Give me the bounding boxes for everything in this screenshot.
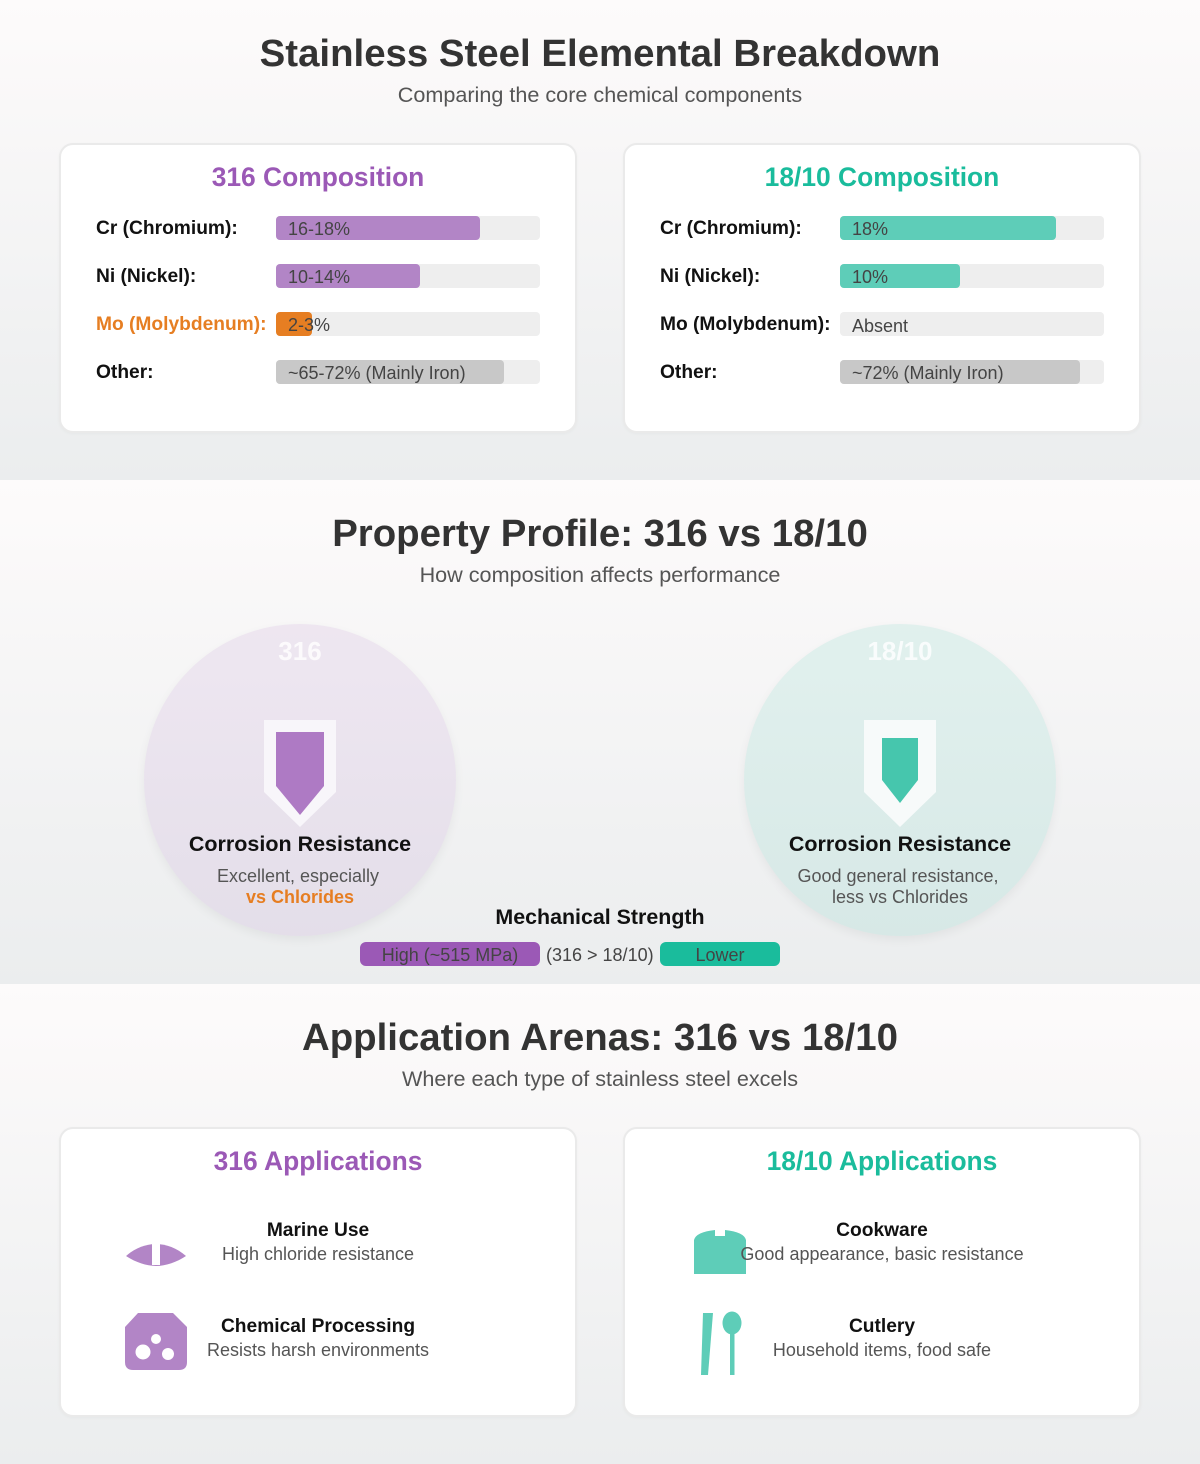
bar: nickel 10% <box>840 264 1104 288</box>
bar: nickel 10-14%: 10-14% <box>288 267 350 287</box>
bar: molybdenum 2-3%: 2-3% <box>288 315 330 335</box>
bar: molybdenum absent: Absent <box>852 316 908 336</box>
heading: 18/10 applications: 18/10 Applications <box>767 1146 997 1176</box>
heading: 316 composition: 316 Composition <box>212 162 424 192</box>
bar: chromium 18%: 18% <box>852 219 888 239</box>
heading: mechanical strength: Mechanical Strength <box>495 905 705 929</box>
row label: nickel: Ni (Nickel): <box>96 266 196 287</box>
heading: corrosion resistance: Corrosion Resistance <box>789 832 1011 856</box>
heading: property profile: Property Profile: 316 vs 18/10 <box>332 512 868 555</box>
subtitle: application arenas: Where each type of stainless steel excels <box>402 1066 798 1091</box>
bar: chromium 18% <box>840 216 1104 240</box>
label: 18/10: 18/10 <box>867 636 933 666</box>
bar: other 65-72% <box>276 360 540 384</box>
icon: marine <box>126 1244 186 1266</box>
row label: chromium: Cr (Chromium): <box>660 218 802 239</box>
text: 316 corrosion description: vs Chlorides <box>246 887 354 907</box>
subtitle: property profile: How composition affects performance <box>420 562 780 587</box>
bar: nickel 10%: 10% <box>852 267 888 287</box>
text: 18/10 corrosion description: Good general resistance, <box>797 866 999 886</box>
heading: corrosion resistance: Corrosion Resistance <box>189 832 411 856</box>
bar: 316 high strength <box>360 942 540 966</box>
bar: chromium 16-18%: 16-18% <box>288 219 350 239</box>
text: 316 corrosion description: Excellent, especially <box>217 866 379 886</box>
bar: other 72%: ~72% (Mainly Iron) <box>852 363 1004 383</box>
circle: 316 corrosion resistance <box>144 624 456 936</box>
label: 316: 316 <box>278 636 322 666</box>
bar: other 65-72%: ~65-72% (Mainly Iron) <box>288 363 466 383</box>
panel: elemental breakdown section <box>0 0 1200 480</box>
bar: 18/10 lower strength: Lower <box>695 945 745 965</box>
text: chemical processing description: Resists harsh environments <box>207 1340 429 1360</box>
heading: 18/10 composition: 18/10 Composition <box>765 162 999 192</box>
row label: molybdenum: Mo (Molybdenum): <box>660 314 831 335</box>
row label: molybdenum: Mo (Molybdenum): <box>96 314 267 335</box>
icon: cookware <box>694 1230 746 1274</box>
icon: 316 shield <box>264 720 336 827</box>
bar: nickel 10-14% <box>276 264 540 288</box>
text: 18/10 corrosion description <box>797 866 999 907</box>
row label: other: Other: <box>660 362 718 383</box>
title: Stainless Steel Elemental Breakdown <box>260 32 940 75</box>
bar: molybdenum 2-3% <box>276 312 540 336</box>
panel: property profile section <box>0 480 1200 984</box>
text: strength comparison: (316 > 18/10) <box>546 945 654 965</box>
panel: 18/10 applications <box>623 1127 1141 1417</box>
panel: application arenas section <box>0 984 1200 1464</box>
bar: other 72% <box>840 360 1104 384</box>
circle: 18/10 corrosion resistance <box>744 624 1056 936</box>
text: cutlery description: Household items, food safe <box>773 1340 991 1360</box>
row label: chromium: Cr (Chromium): <box>96 218 238 239</box>
bar: molybdenum absent <box>840 312 1104 336</box>
panel: 316 composition <box>59 143 577 433</box>
panel: 316 applications <box>59 1127 577 1417</box>
icon: cutlery <box>701 1312 742 1375</box>
text: marine description: High chloride resistance <box>222 1244 414 1264</box>
subtitle: Comparing the core chemical components <box>398 82 802 107</box>
text: marine use: Marine Use <box>267 1220 369 1241</box>
heading: 316 applications: 316 Applications <box>214 1146 422 1176</box>
row label: nickel: Ni (Nickel): <box>660 266 760 287</box>
bar: 316 high strength: High (~515 MPa) <box>382 945 518 965</box>
text: cutlery: Cutlery <box>849 1316 915 1337</box>
text: 18/10 corrosion description: less vs Chlorides <box>832 887 968 907</box>
panel: 18/10 composition <box>623 143 1141 433</box>
icon: 18/10 shield <box>864 720 936 827</box>
text: cookware: Cookware <box>836 1220 928 1241</box>
bar: 18/10 lower strength <box>660 942 780 966</box>
icon: chemical processing <box>125 1313 187 1370</box>
text: 316 corrosion description <box>217 866 379 907</box>
heading: application arenas: Application Arenas: 316 vs 18/10 <box>302 1016 898 1059</box>
text: chemical processing: Chemical Processing <box>221 1316 415 1337</box>
text: cookware description: Good appearance, basic resistance <box>740 1244 1024 1264</box>
bar: chromium 16-18% <box>276 216 540 240</box>
row label: other: Other: <box>96 362 154 383</box>
